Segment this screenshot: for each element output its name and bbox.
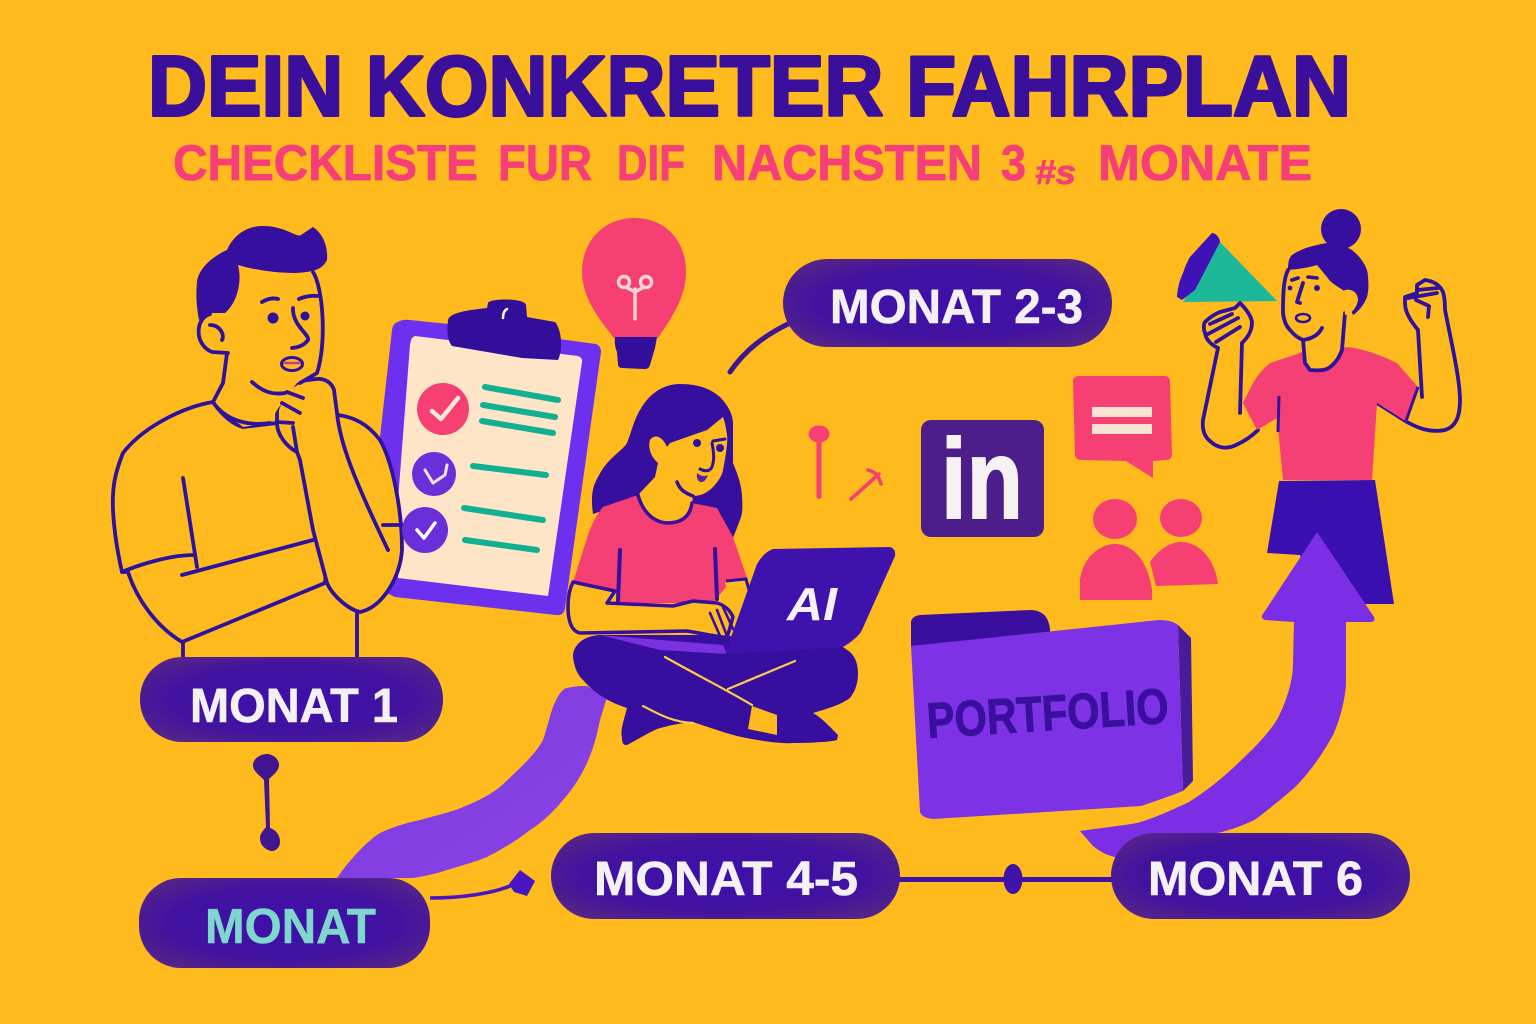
left fist	[1204, 303, 1252, 348]
label: monat 6	[1111, 833, 1410, 919]
neck and face	[1283, 265, 1352, 370]
label: monat 1	[140, 657, 443, 742]
megaphone	[1177, 233, 1277, 302]
folder: portfolio	[911, 610, 1193, 819]
woman: laptop lid	[725, 547, 895, 654]
label: monat (teal)	[139, 878, 430, 968]
woman with megaphone	[1177, 209, 1460, 604]
man: hair	[196, 226, 327, 320]
man: face features	[262, 296, 317, 370]
connector: monat to month 4-5	[430, 870, 535, 898]
connector: month 4-5 to month 6	[898, 864, 1113, 894]
subtitle: CHECKLISTE	[173, 135, 478, 191]
title: DEIN KONKRETER FAHRPLAN	[148, 40, 1351, 134]
subtitle: DIF	[617, 135, 685, 191]
right fist	[1405, 280, 1445, 330]
label: monat 6: MONAT 6	[1148, 853, 1363, 906]
woman: ear, neck and face	[638, 417, 727, 523]
label: monat 1: MONAT 1	[190, 680, 398, 733]
ear	[1343, 290, 1358, 315]
icon: pin	[808, 426, 830, 499]
man thinking	[113, 226, 403, 657]
man: forearm	[277, 379, 402, 612]
label: monat 2-3	[783, 259, 1112, 347]
label: monat 2-3: MONAT 2-3	[830, 281, 1083, 334]
label: monat 4-5: MONAT 4-5	[594, 853, 858, 906]
subtitle: NACHSTEN	[712, 135, 982, 191]
connector: month 2-3 callout tail	[730, 323, 790, 372]
arrow: growth to top right	[1080, 532, 1374, 860]
man: lower lines into label	[183, 612, 357, 657]
woman with laptop	[568, 384, 895, 745]
icon: people	[1080, 499, 1218, 600]
label: monat (teal): MONAT	[205, 900, 376, 954]
arrow ribbon: month 1 to laptop	[337, 686, 607, 878]
woman: arm	[568, 582, 733, 638]
man: neck and face	[212, 265, 322, 427]
subtitle: FUR	[498, 135, 592, 191]
woman: laptop base	[600, 635, 727, 654]
woman: face features	[693, 439, 725, 482]
hair and bun	[1288, 243, 1368, 315]
folder label: PORTFOLIO	[925, 678, 1170, 749]
shirt	[1243, 347, 1418, 480]
woman: hair	[592, 384, 742, 538]
face features	[1288, 277, 1320, 322]
man: torso and sleeve	[113, 402, 340, 642]
icon: speech bubble	[1073, 376, 1172, 478]
subtitle	[173, 135, 1312, 192]
label: monat 4-5	[551, 833, 900, 919]
icon: small hammer	[851, 470, 881, 499]
woman: AI label: AI	[786, 578, 838, 630]
man: ear	[199, 314, 228, 353]
skirt	[1267, 480, 1394, 604]
checklist items	[402, 383, 558, 553]
subtitle: MONATE	[1098, 135, 1312, 191]
man: sleeve hem and arm lines	[122, 478, 313, 575]
subtitle: #s	[1035, 154, 1076, 192]
connector: month 1 to next	[253, 754, 280, 851]
icon: light bulb	[582, 218, 686, 369]
man: fingers	[277, 392, 303, 452]
subtitle: 3	[1001, 135, 1026, 191]
woman: shirt	[573, 496, 747, 603]
woman: crossed legs	[573, 635, 858, 745]
icon: linkedin: in	[941, 416, 1023, 542]
arms	[1203, 343, 1258, 448]
clipboard board	[380, 299, 601, 615]
